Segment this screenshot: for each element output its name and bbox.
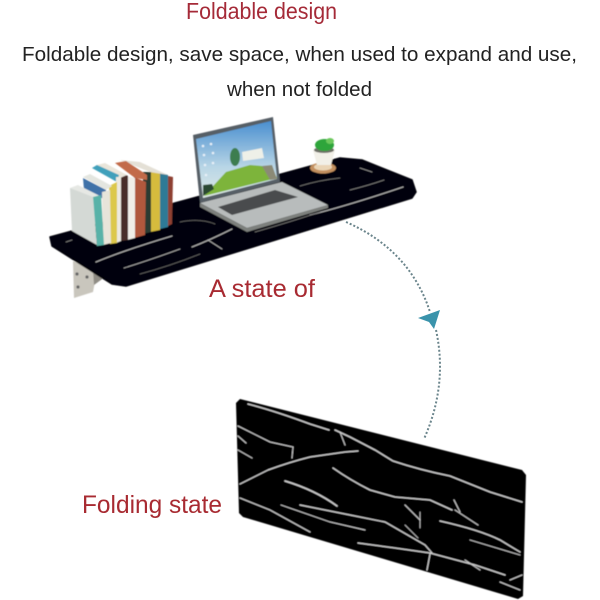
state label: A state of bbox=[209, 275, 315, 303]
unfolded marble table with objects bbox=[50, 117, 416, 298]
books bbox=[70, 160, 173, 246]
laptop bbox=[193, 117, 328, 232]
potted plant bbox=[310, 138, 336, 174]
arrowhead bbox=[418, 310, 440, 329]
description text: when not folded bbox=[226, 78, 372, 101]
description text: Foldable design, save space, when used to expand and use, bbox=[22, 43, 577, 66]
folded marble panel bbox=[236, 399, 526, 599]
description text bbox=[22, 43, 577, 101]
folding state label: Folding state bbox=[82, 491, 222, 519]
table top bbox=[50, 158, 416, 286]
wall bracket bbox=[73, 261, 105, 298]
dotted curved arrow bbox=[346, 222, 440, 439]
